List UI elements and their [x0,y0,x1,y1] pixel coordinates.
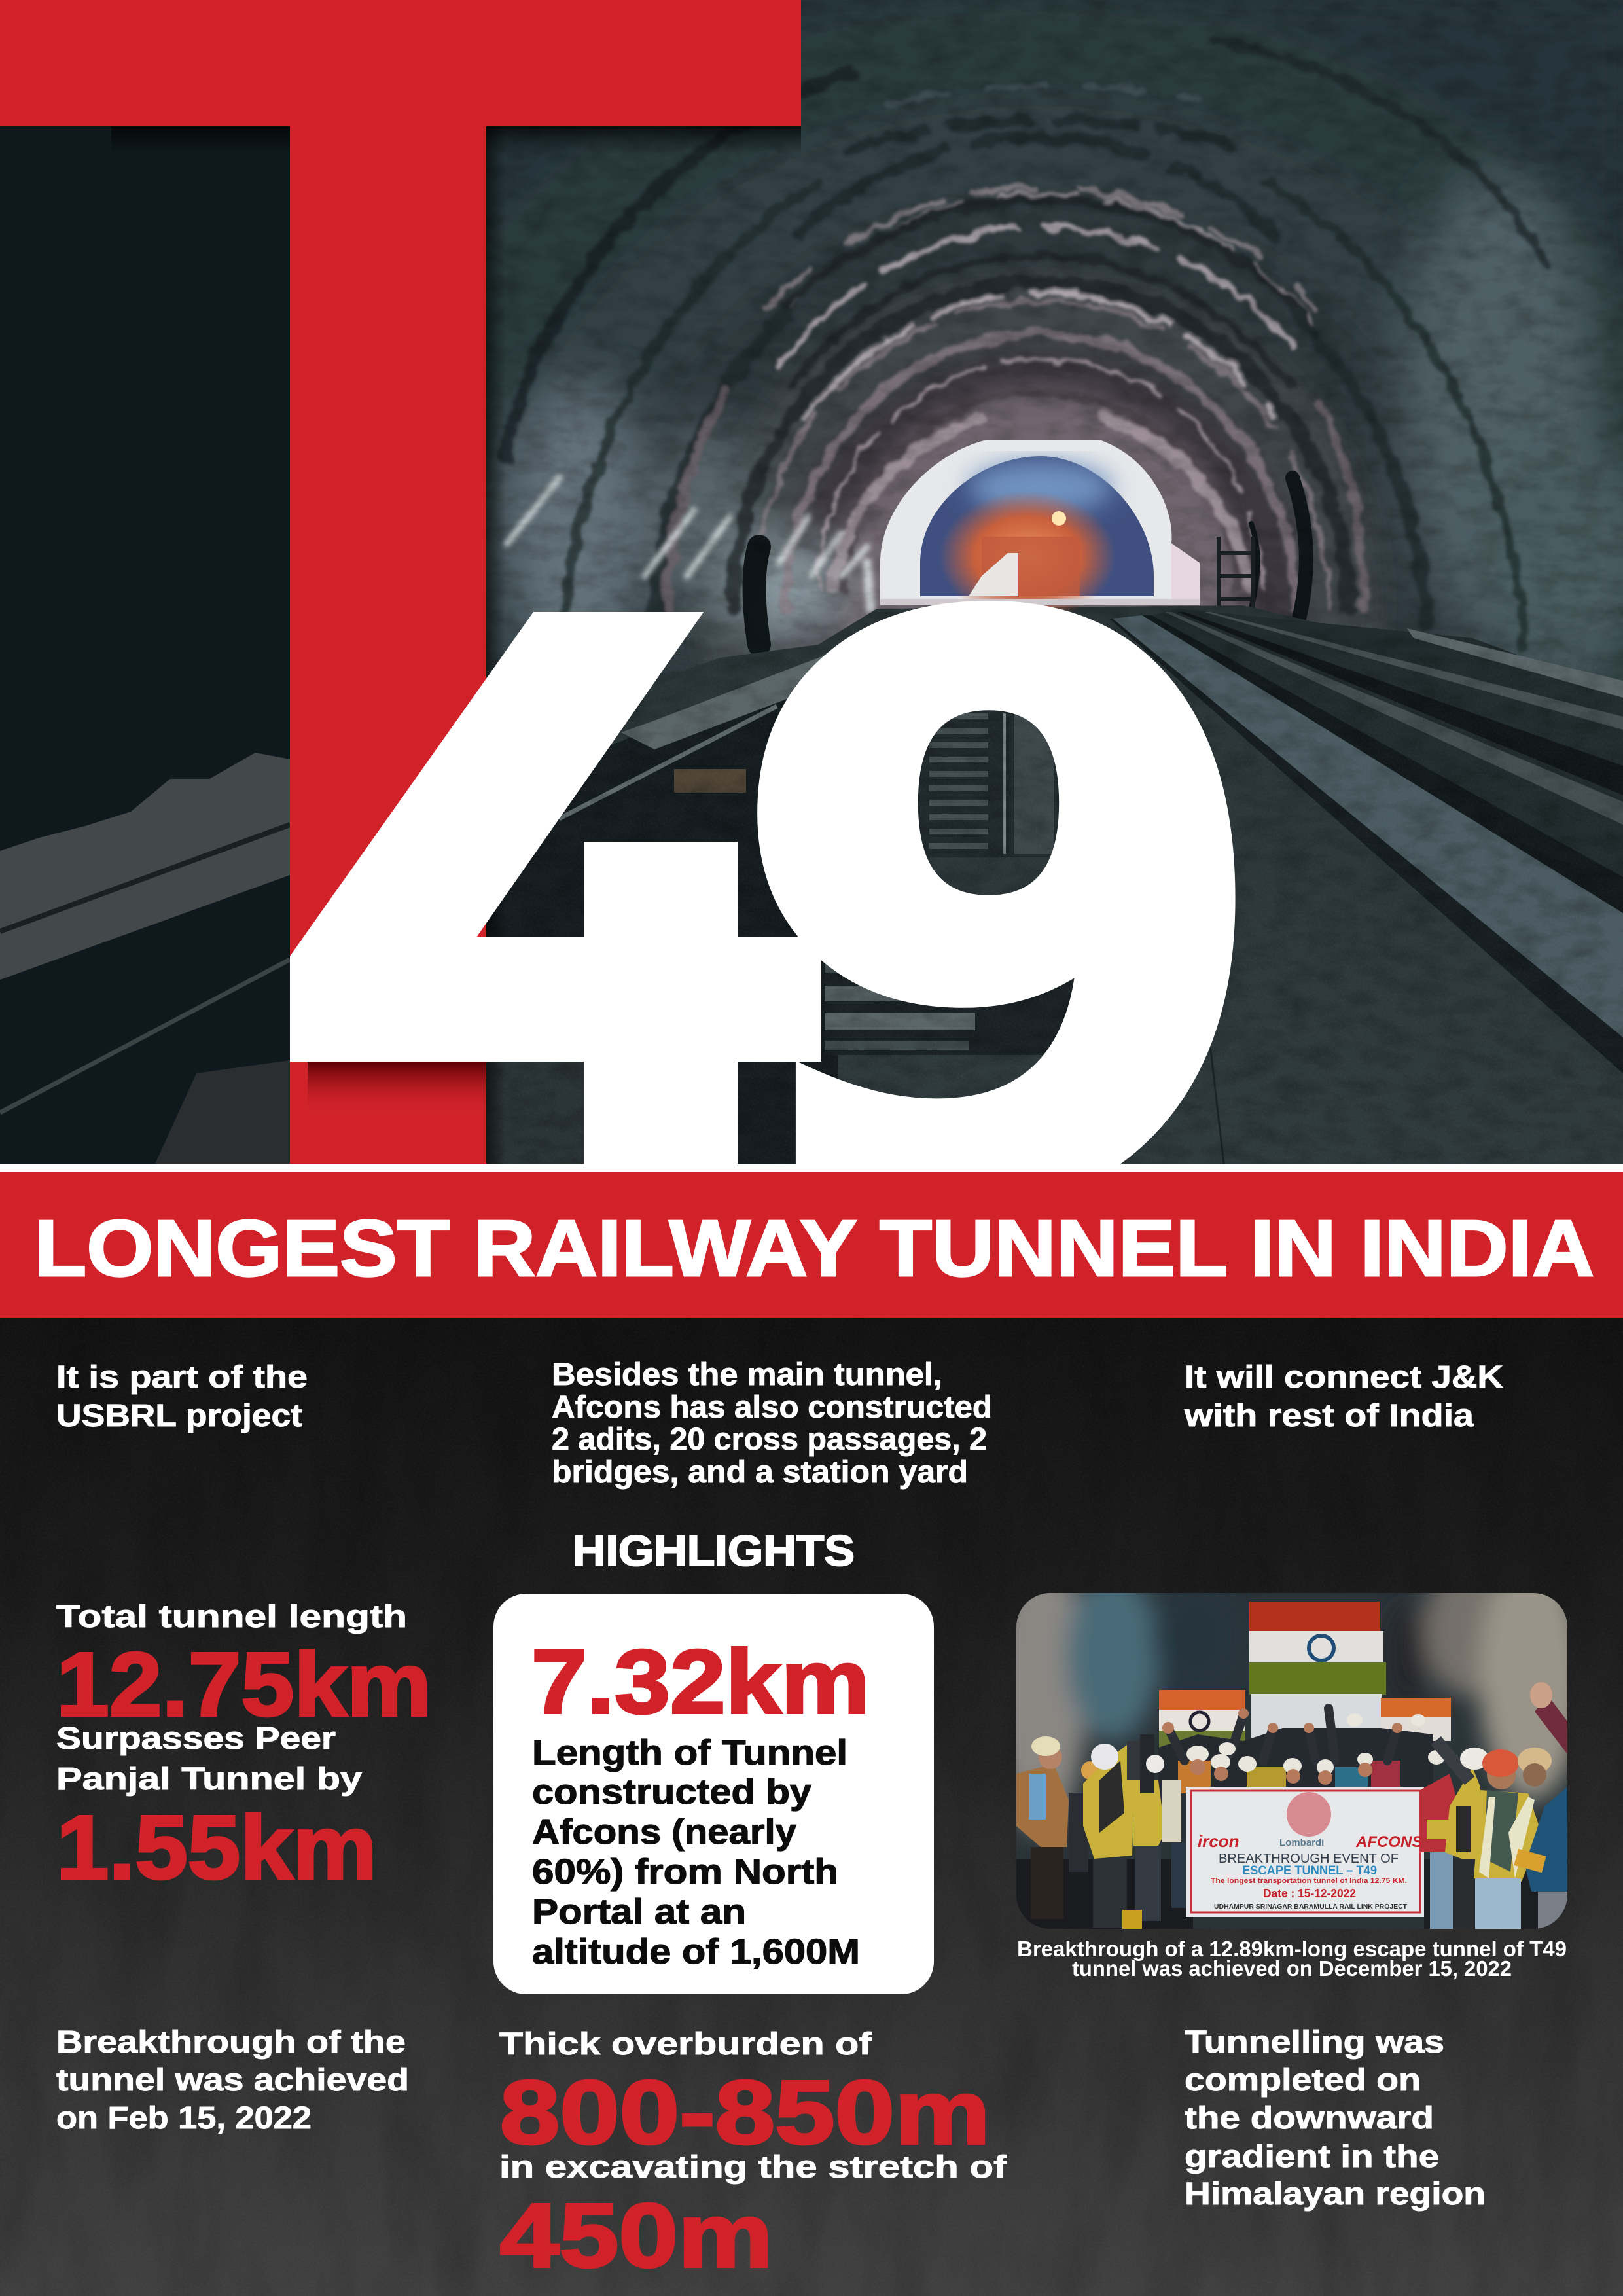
card description: Length of Tunnel [532,1733,847,1772]
group photo caption: Breakthrough of a 12.89km-long escape tunnel of T49 [1017,1937,1567,1961]
back banner [1251,1694,1382,1759]
fact: downward gradient: the downward [1185,2101,1434,2136]
stat: overburden and stretch: in excavating the stretch of [499,2150,1007,2185]
left dark wall of tunnel [0,0,290,1164]
stat: surpasses Peer Panjal [56,1721,377,1898]
wall recess dark strips [754,478,1306,645]
main Indian flag [1249,1602,1386,1695]
fact: Afcons constructions: Besides the main tunnel, [552,1357,942,1392]
fact: Afcons constructions: 2 adits, 20 cross passages, 2 [552,1422,987,1457]
foreground banner: UDHAMPUR SRINAGAR BARAMULLA RAIL LINK PROJECT [1214,1903,1407,1910]
fact: breakthrough date: tunnel was achieved [56,2063,409,2098]
fact: downward gradient [1185,2025,1486,2212]
tunnel ring streaks [504,39,1544,648]
white card: 7.32km: 7.32km [531,1632,870,1732]
white card: 7.32km [493,1594,934,1994]
white divider strip [0,1164,1623,1172]
workers on right [1420,1682,1567,1931]
title banner [0,1172,1623,1318]
side flags [1159,1690,1451,1749]
stat: overburden and stretch: 450m [500,2185,773,2286]
fact: downward gradient: Himalayan region [1185,2177,1486,2212]
stat: overburden and stretch: 800-850m [500,2062,990,2163]
foreground banner: The longest transportation tunnel of India 12.75 KM. [1211,1877,1407,1885]
fact: downward gradient: gradient in the [1185,2140,1439,2174]
stat: surpasses Peer Panjal: 1.55km [56,1797,377,1898]
fact: connects J&K [1184,1360,1503,1433]
fact: USBRL project: It is part of the [56,1360,308,1395]
fact: breakthrough date [56,2025,409,2136]
tunnel floor and tracks [486,605,1623,1164]
lower section dark textured background [0,1318,1623,2296]
highlights heading: HIGHLIGHTS [573,1526,855,1575]
fact: Afcons constructions: Afcons has also constructed [552,1390,992,1425]
tunnel photograph background [0,0,1623,1211]
tunnel rock walls [995,1545,1584,1833]
title text: LONGEST RAILWAY TUNNEL IN INDIA [34,1204,1594,1293]
fact: connects J&K: It will connect J&K [1185,1360,1503,1395]
fact: breakthrough date: on Feb 15, 2022 [56,2101,312,2136]
ladder scaffold [1219,537,1253,628]
foreground banner: ircon [1198,1831,1240,1851]
foreground banner: Date : 15-12-2022 [1263,1887,1356,1900]
fact: connects J&K: with rest of India [1184,1399,1474,1433]
photo texture overlay [486,0,1623,1164]
wall lights [507,478,870,609]
tunnel wall tonal rings [491,12,1622,679]
red T letterform [0,0,801,1164]
stat: overburden and stretch [499,2027,1007,2286]
fact: Afcons constructions [552,1357,992,1490]
crowd [1158,1708,1445,1793]
fact: downward gradient: completed on [1185,2063,1421,2098]
foreground banner: AFCONS [1355,1833,1422,1851]
card description: constructed by [532,1772,812,1812]
card description: Afcons (nearly [532,1812,796,1852]
large number 49: 4 [266,459,859,1328]
foreground banner: BREAKTHROUGH EVENT OF [1219,1852,1399,1866]
card description: altitude of 1,600M [532,1932,860,1971]
fact: downward gradient: Tunnelling was [1185,2025,1444,2060]
stat: total tunnel length: Total tunnel length [56,1600,407,1634]
foreground banner: Lombardi [1279,1837,1324,1848]
fact: USBRL project: USBRL project [56,1399,302,1433]
breakthrough group photo [995,1545,1584,1931]
red shadow beneath the 4 [308,1062,486,1114]
stat: surpasses Peer Panjal: Panjal Tunnel by [56,1762,362,1797]
card description: 60%) from North [532,1852,838,1892]
group photo caption [1017,1937,1567,1981]
workers on left [1016,1734,1193,1931]
stat: surpasses Peer Panjal: Surpasses Peer [56,1721,336,1756]
fact: breakthrough date: Breakthrough of the [56,2025,406,2060]
stat: total tunnel length: 12.75km [56,1634,431,1735]
foreground banner [1186,1787,1424,1917]
card description: Portal at an [532,1892,746,1931]
lighter wall patches [504,170,1623,681]
large number 49: 9 [724,463,1278,1379]
T drop shadow [111,126,801,1164]
stat: overburden and stretch: Thick overburden of [499,2027,872,2062]
large number 49 [266,459,1278,1379]
foreground banner: ESCAPE TUNNEL – T49 [1242,1864,1377,1878]
portal at tunnel end [880,440,1200,622]
group photo caption: tunnel was achieved on December 15, 2022 [1072,1956,1512,1981]
fact: USBRL project [56,1360,308,1433]
fact: Afcons constructions: bridges, and a station yard [552,1455,968,1490]
card description [532,1733,860,1971]
